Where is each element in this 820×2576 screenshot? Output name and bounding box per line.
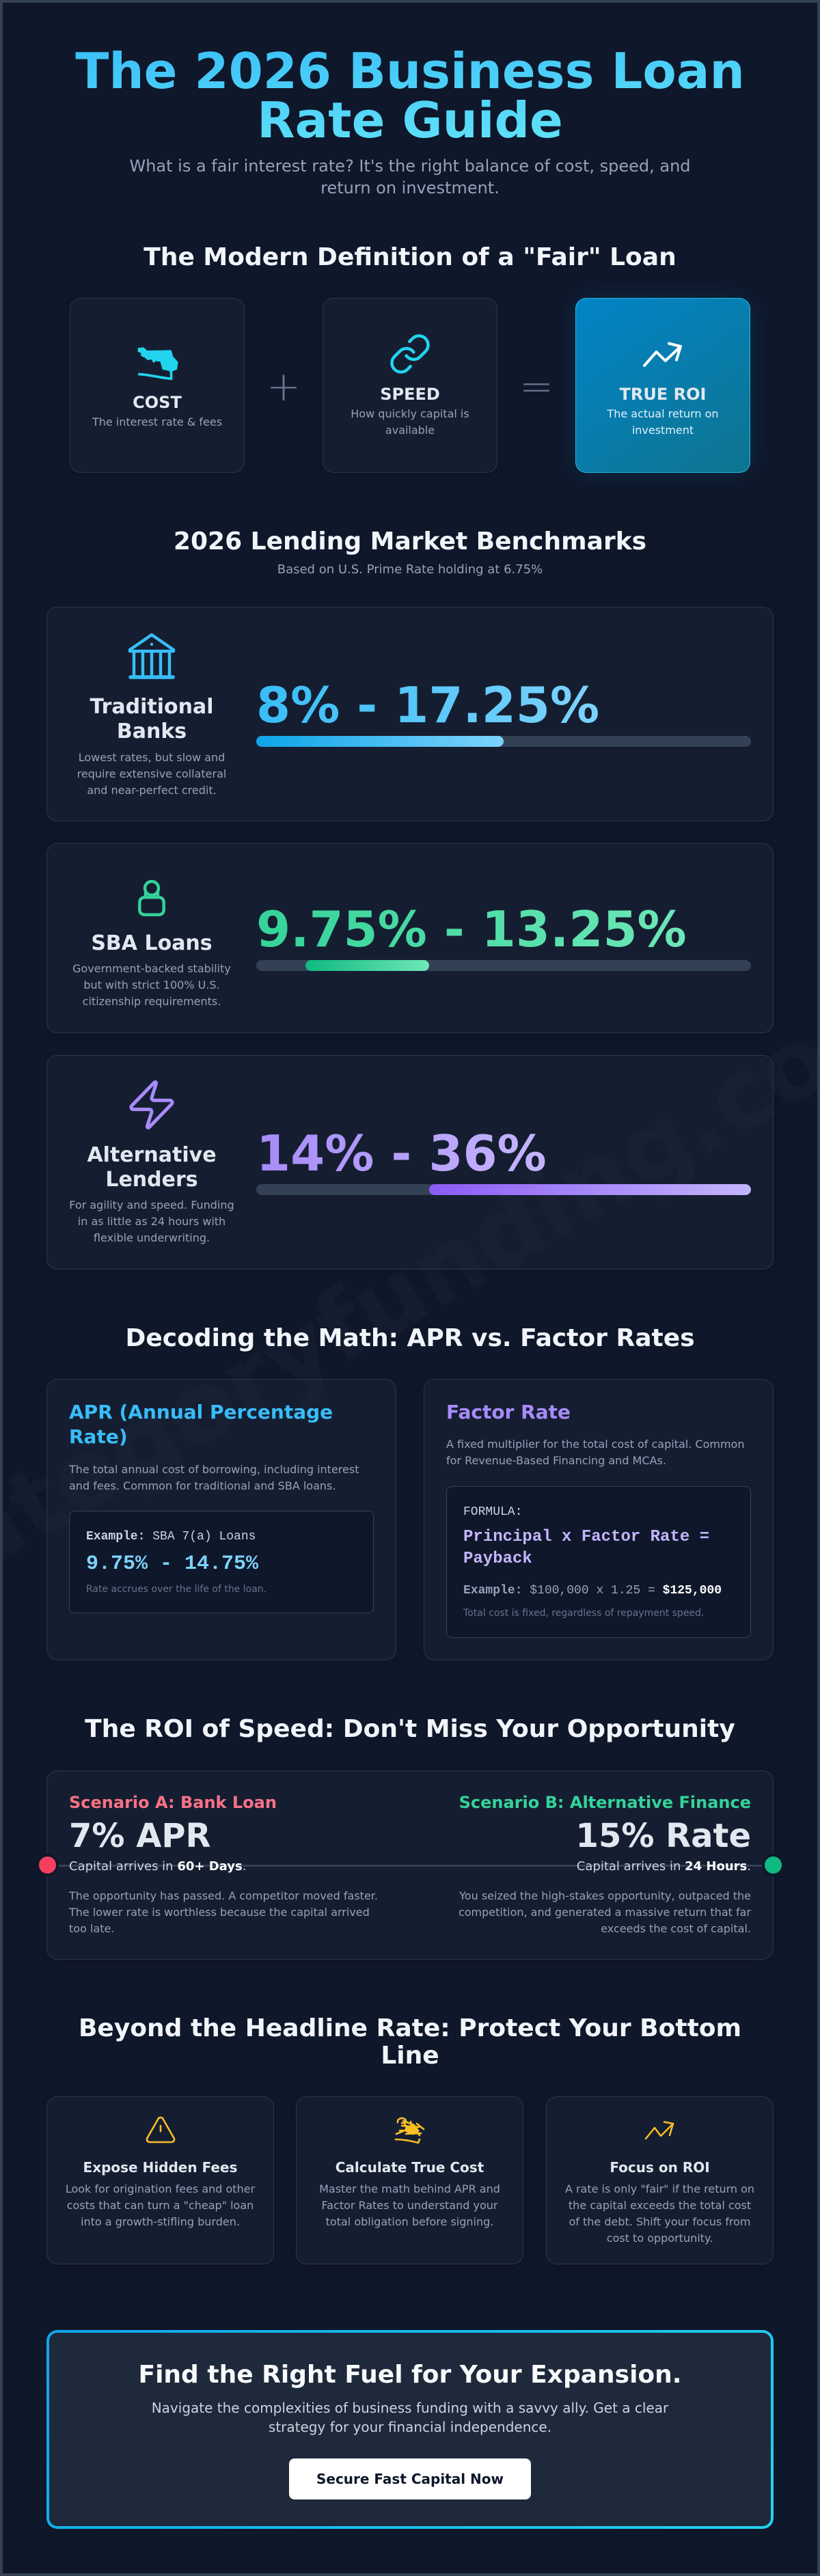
title: calculate true cost: Calculate True Cost (336, 2159, 484, 2176)
description: factor rate: for Revenue-Based Financing and MCAs. (446, 1454, 666, 1467)
description: calculate true cost (319, 2182, 500, 2228)
description: speed (351, 407, 469, 437)
description: true roi: investment (632, 424, 694, 437)
panel: apr (46, 1379, 396, 1660)
description: factor rate: A fixed multiplier for the total cost of capital. Common (446, 1438, 744, 1451)
formula: Principal x Factor Rate = (463, 1528, 709, 1546)
panel: true roi (575, 298, 750, 473)
panel: traditional banks (46, 607, 774, 821)
formula: Payback (463, 1550, 532, 1568)
description: sba loans: but with strict 100% U.S. (83, 978, 220, 991)
description: focus on roi: the capital exceeds the total cost (569, 2199, 751, 2212)
name: alternative lenders: Alternative (87, 1143, 217, 1167)
icon: trending up (645, 2121, 674, 2140)
icon: warning (146, 2117, 175, 2143)
cta heading: Find the Right Fuel for Your Expansion. (138, 2361, 681, 2389)
description: focus on roi: of the debt. Shift your focus from (569, 2215, 750, 2228)
timeline line (55, 1865, 765, 1867)
description: alternative lenders: flexible underwriting. (94, 1231, 210, 1244)
icon: lightning bolt (129, 1080, 174, 1129)
scenario b rate: 15% Rate (576, 1817, 751, 1855)
description: alternative lenders: in as little as 24 hours with (78, 1215, 226, 1228)
example rate: 9.75% - 14.75% (86, 1552, 258, 1576)
cta text: strategy for your financial independence. (269, 2419, 551, 2435)
title: expose hidden fees: Expose Hidden Fees (83, 2159, 237, 2176)
heading: apr: Rate) (69, 1425, 128, 1448)
scenario a timing: Capital arrives in 60+ Days. (69, 1859, 246, 1874)
label: speed: SPEED (380, 385, 440, 404)
scenario a outcome (68, 1889, 378, 1935)
heading: modern definition: The Modern Definition of a "Fair" Loan (144, 243, 676, 271)
example note: Rate accrues over the life of the loan. (86, 1584, 266, 1595)
heading: decoding the math: Decoding the Math: APR vs. Factor Rates (125, 1324, 695, 1352)
subheading: benchmarks: Based on U.S. Prime Rate holding at 6.75% (277, 562, 543, 577)
panel: sba loans (46, 843, 774, 1033)
heading: apr: APR (Annual Percentage (69, 1401, 333, 1423)
marker: scenario a (36, 1853, 59, 1876)
heading: benchmarks: 2026 Lending Market Benchmarks (174, 527, 646, 556)
scenario b outcome: exceeds the cost of capital. (601, 1922, 751, 1935)
panel: scenarios (46, 1770, 774, 1960)
icon: lock (138, 880, 165, 916)
range bar: alternative lenders (256, 1184, 751, 1195)
heading: beyond the headline rate (79, 2014, 741, 2070)
icon: bank (128, 633, 175, 679)
scenario a outcome: too late. (69, 1922, 114, 1935)
icon: cost scribble (138, 347, 178, 380)
icon: cost scribble (395, 2117, 425, 2144)
rate: alternative lenders: 14% - 36% (256, 1125, 547, 1182)
description: sba loans: Government-backed stability (72, 962, 231, 975)
label: true roi: TRUE ROI (620, 385, 706, 404)
description: traditional banks: and near-perfect credit. (87, 784, 217, 797)
range bar: sba loans (256, 960, 751, 971)
operator: equals: = (519, 363, 554, 411)
title: focus on roi: Focus on ROI (610, 2159, 710, 2176)
cta button (289, 2458, 531, 2499)
description: expose hidden fees: Look for origination fees and other (66, 2182, 255, 2195)
description: expose hidden fees: into a growth-stifling burden. (81, 2215, 240, 2228)
scenario a rate: 7% APR (69, 1817, 210, 1855)
cta text: Navigate the complexities of business funding with a savvy ally. Get a clear (152, 2400, 668, 2416)
panel: speed (323, 298, 497, 473)
marker: scenario b (761, 1853, 784, 1876)
scenario b label: Scenario B: Alternative Finance (459, 1793, 751, 1812)
panel: call to action (46, 2330, 774, 2529)
icon: link (390, 334, 430, 374)
name: traditional banks: Banks (117, 720, 187, 743)
description: expose hidden fees: costs that can turn a "cheap" loan (67, 2199, 254, 2212)
panel: alternative lenders (46, 1055, 774, 1270)
operator: plus: + (266, 363, 301, 411)
description: apr: The total annual cost of borrowing, including interest (69, 1463, 359, 1476)
scenario b timing: Capital arrives in 24 Hours. (577, 1859, 751, 1874)
description: traditional banks: require extensive collateral (77, 767, 226, 780)
scenario a label: Scenario A: Bank Loan (69, 1793, 277, 1812)
panel: calculate true cost (296, 2096, 523, 2264)
description: calculate true cost: Master the math behind APR and (319, 2182, 500, 2195)
description: speed: available (385, 424, 435, 437)
description: cost: The interest rate & fees (92, 415, 222, 428)
label: cost: COST (133, 393, 182, 412)
description: traditional banks: Lowest rates, but slow and (79, 751, 225, 764)
subtitle: return on investment. (320, 178, 500, 197)
range bar: traditional banks (256, 736, 751, 747)
description: true roi: The actual return on (607, 407, 719, 420)
panel: expose hidden fees (46, 2096, 274, 2264)
name: alternative lenders (87, 1143, 217, 1192)
name: traditional banks (90, 695, 214, 743)
panel: cost (70, 298, 245, 473)
description: alternative lenders: For agility and speed. Funding (69, 1198, 234, 1211)
name: traditional banks: Traditional (90, 695, 214, 719)
title: The 2026 Business Loan (75, 42, 745, 100)
heading: apr (69, 1401, 333, 1448)
scenario a outcome: The opportunity has passed. A competitor moved faster. (69, 1889, 378, 1902)
example label: Example: SBA 7(a) Loans (86, 1530, 256, 1544)
title (0, 47, 820, 145)
formula example: Example: $100,000 x 1.25 = $125,000 (463, 1584, 722, 1598)
name: alternative lenders: Lenders (105, 1168, 198, 1192)
formula (463, 1528, 709, 1568)
rate: sba loans: 9.75% - 13.25% (256, 901, 687, 958)
description: traditional banks (77, 751, 226, 797)
cta text (152, 2400, 668, 2435)
name: sba loans: SBA Loans (91, 931, 213, 955)
description: apr (68, 1463, 359, 1492)
description: sba loans (72, 962, 231, 1008)
icon: trending up (642, 342, 682, 368)
heading: beyond the headline rate: Beyond the Headline Rate: Protect Your Bottom (79, 2014, 741, 2042)
subtitle (129, 156, 691, 197)
description: focus on roi: A rate is only "fair" if the return on (565, 2182, 754, 2195)
description: calculate true cost: total obligation before signing. (326, 2215, 493, 2228)
description: true roi (607, 407, 719, 437)
description: speed: How quickly capital is (351, 407, 469, 420)
scenario b outcome (459, 1889, 751, 1935)
rate: traditional banks: 8% - 17.25% (256, 676, 599, 734)
title: Rate Guide (257, 92, 563, 149)
heading: beyond the headline rate: Line (381, 2042, 439, 2070)
scenario b outcome: You seized the high-stakes opportunity, outpaced the (459, 1889, 751, 1902)
scenario a (68, 1793, 378, 1935)
heading: roi of speed: The ROI of Speed: Don't Miss Your Opportunity (85, 1715, 735, 1743)
formula box (446, 1486, 751, 1638)
description: focus on roi (565, 2182, 754, 2245)
description: focus on roi: cost to opportunity. (607, 2232, 713, 2245)
scenario a outcome: The lower rate is worthless because the capital arrived (69, 1906, 370, 1919)
example box: apr (69, 1511, 374, 1613)
description: apr: and fees. Common for traditional and SBA loans. (69, 1479, 336, 1492)
formula label: FORMULA: (463, 1505, 522, 1519)
description: calculate true cost: Factor Rates to understand your (322, 2199, 497, 2212)
description: factor rate (446, 1438, 744, 1467)
heading: factor rate: Factor Rate (446, 1401, 571, 1423)
subtitle: What is a fair interest rate? It's the right balance of cost, speed, and (129, 156, 691, 176)
scenario b outcome: competition, and generated a massive return that far (459, 1906, 751, 1919)
panel: factor rate (424, 1379, 774, 1660)
description: expose hidden fees (66, 2182, 256, 2228)
cta button: Secure Fast Capital Now (316, 2471, 504, 2487)
scenario b (459, 1793, 751, 1935)
description: alternative lenders (69, 1198, 234, 1244)
description: sba loans: citizenship requirements. (83, 995, 221, 1008)
formula note: Total cost is fixed, regardless of repayment speed. (463, 1608, 704, 1619)
panel: focus on roi (546, 2096, 774, 2264)
